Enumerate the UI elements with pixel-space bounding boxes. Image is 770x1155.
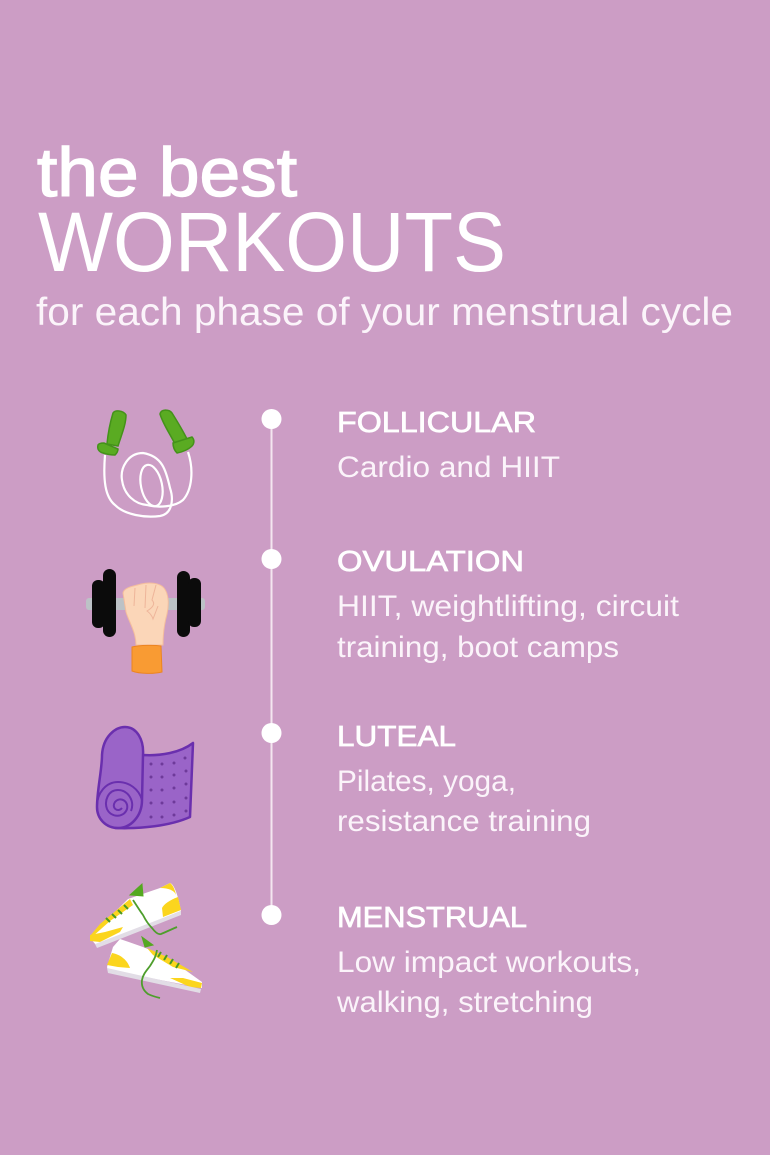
phase: menstrual <box>336 902 641 1019</box>
text: luteal workouts <box>337 765 591 838</box>
text: follicular workouts: Cardio and HIIT <box>337 451 560 484</box>
icon: rolled yoga mat <box>97 727 193 828</box>
text: menstrual workouts: walking, stretching <box>336 986 593 1019</box>
text: ovulation workouts: training, boot camps <box>337 631 619 664</box>
heading: OVULATION: OVULATION <box>337 546 524 578</box>
heading: FOLLICULAR: FOLLICULAR <box>337 407 536 439</box>
mat texture dots <box>150 756 188 818</box>
bottom sneaker <box>107 937 202 998</box>
phase: ovulation <box>337 546 680 664</box>
heading: LUTEAL: LUTEAL <box>337 721 456 753</box>
icon: sneakers <box>90 883 202 998</box>
text: luteal workouts: resistance training <box>337 805 591 838</box>
icon: fist lifting dumbbell <box>86 569 205 673</box>
top sneaker <box>90 883 181 948</box>
text: menstrual workouts <box>336 946 641 1019</box>
heading: MENSTRUAL: MENSTRUAL <box>337 902 527 934</box>
subtitle: for each phase of your menstrual cycle <box>36 291 733 334</box>
timeline <box>262 409 282 925</box>
icon: jump rope <box>98 410 194 517</box>
text: luteal workouts: Pilates, yoga, <box>337 765 516 798</box>
title <box>36 134 733 334</box>
phase: follicular <box>337 407 560 484</box>
text: menstrual workouts: Low impact workouts, <box>337 946 641 979</box>
title line: the best: the best <box>37 134 297 211</box>
phase: luteal <box>337 721 591 838</box>
text: ovulation workouts: HIIT, weightlifting, circuit <box>337 590 680 623</box>
title line: WORKOUTS: WORKOUTS <box>38 195 506 289</box>
text: ovulation workouts <box>337 590 680 664</box>
